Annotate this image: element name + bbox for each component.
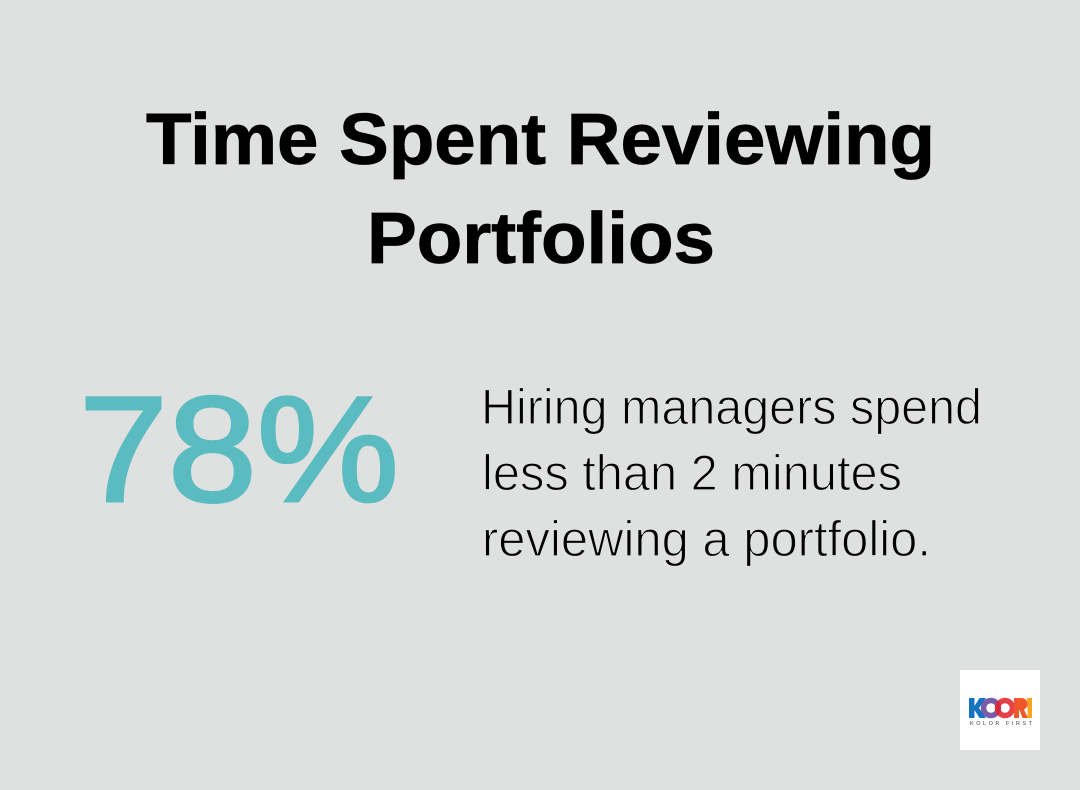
title: Portfolios xyxy=(367,199,715,279)
title xyxy=(146,100,935,279)
description text xyxy=(481,379,982,567)
title: Time Spent Reviewing xyxy=(146,100,935,180)
logo digit 1 xyxy=(1027,698,1032,718)
description text: less than 2 minutes xyxy=(482,445,902,501)
description text: reviewing a portfolio. xyxy=(482,511,931,567)
logo letter K xyxy=(969,698,986,718)
statistic: 78%: 78% xyxy=(79,365,399,533)
logo: Koori Kolor First xyxy=(960,670,1040,750)
logo letter R xyxy=(1014,698,1028,718)
description text: Hiring managers spend xyxy=(481,379,982,435)
logo letters O O xyxy=(984,700,1012,716)
logo tagline: KOLOR FIRST xyxy=(970,721,1033,727)
